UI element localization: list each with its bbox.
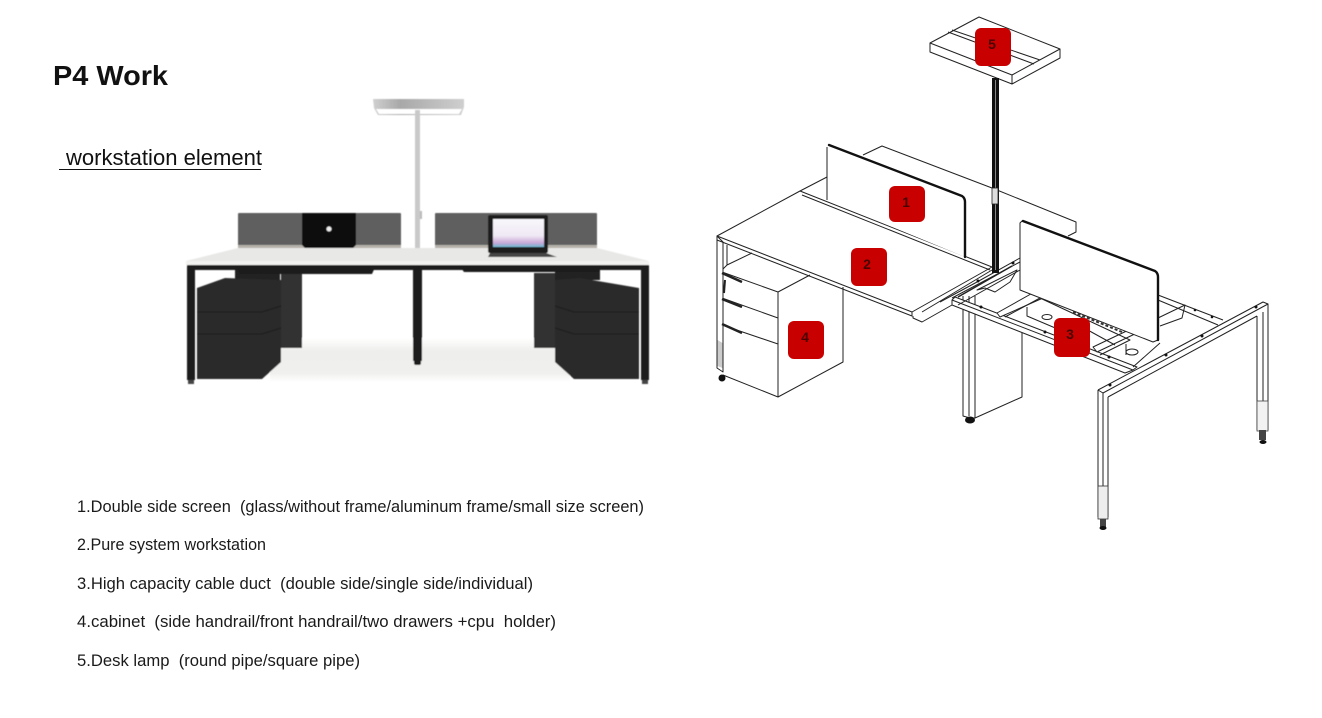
item 4: 4.cabinet (side handrail/front handrail/two drawers +cpu holder): [77, 612, 556, 631]
screen 2: [1020, 221, 1158, 342]
exploded line drawing: [717, 17, 1268, 530]
left screen: [238, 213, 401, 252]
badge 4: 4: [801, 329, 809, 345]
badge 1: 1: [902, 194, 910, 210]
item 3: 3.High capacity cable duct (double side/single side/individual): [77, 574, 533, 593]
screen 1: [827, 145, 965, 257]
item 5: 5.Desk lamp (round pipe/square pipe): [77, 651, 360, 670]
badge 5: 5: [988, 36, 996, 52]
badge 3: 3: [1066, 326, 1074, 342]
badge 3: [1054, 318, 1090, 357]
left cabinet: [197, 278, 281, 379]
right screen: [435, 213, 597, 252]
back pedestals: [235, 270, 600, 348]
laptop right: [488, 215, 557, 257]
frame bolts: [976, 262, 1258, 386]
lamp drawing: [930, 17, 1060, 273]
title: P4 Work: [53, 60, 168, 91]
desk frame: [187, 265, 649, 384]
badge 2: [851, 248, 887, 286]
badge 4: [788, 321, 824, 359]
desk top panel: [717, 191, 992, 312]
desk top: [186, 248, 649, 266]
rear leg and pedestal: [963, 296, 1022, 424]
frame cross beams and cable duct: [940, 258, 1223, 373]
laptop left: [302, 213, 356, 248]
floor shadow: [270, 338, 570, 382]
right cabinet: [555, 278, 639, 379]
badge 5: [975, 28, 1011, 66]
item 2: 2.Pure system workstation: [77, 535, 266, 554]
item 1: 1.Double side screen (glass/without frame/aluminum frame/small size screen): [77, 497, 644, 516]
subtitle: workstation element: workstation element: [65, 145, 262, 170]
front leg frame: [1098, 302, 1268, 530]
badge 1: [889, 186, 925, 222]
desk lamp: [373, 99, 464, 252]
cabinet drawing: [717, 236, 843, 397]
photo: workstation product: [186, 99, 649, 384]
back desk top: [800, 146, 1076, 236]
badge 2: 2: [863, 256, 871, 272]
element list: [77, 497, 644, 670]
